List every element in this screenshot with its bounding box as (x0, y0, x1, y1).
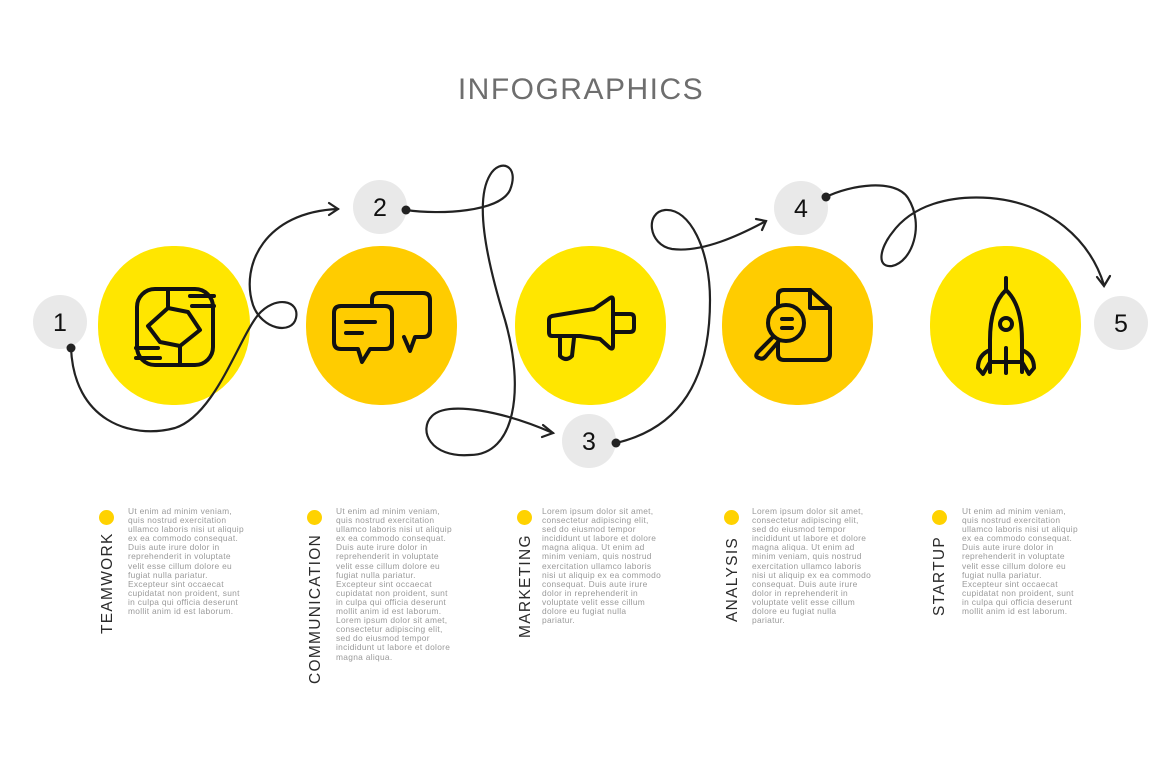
paragraph (336, 506, 452, 662)
paragraph: velit esse cillum dolore eu (962, 561, 1066, 571)
label: COMMUNICATION (307, 534, 324, 684)
paragraph: exercitation ullamco laboris (752, 561, 861, 571)
paragraph: velit esse cillum dolore eu (128, 561, 232, 571)
number circle 4: 4 (794, 195, 808, 223)
paragraph: consectetur adipiscing elit, (542, 515, 649, 525)
paragraph: quis nostrud exercitation (128, 515, 226, 525)
paragraph: incididunt ut labore et dolore (542, 533, 656, 543)
paragraph: Excepteur sint occaecat (336, 579, 432, 589)
paragraph: magna aliqua. Ut enim ad (542, 542, 645, 552)
number circle 5: 5 (1114, 310, 1128, 338)
column 1: teamwork (99, 506, 244, 634)
paragraph: dolore eu fugiat nulla (542, 606, 626, 616)
number circle 2 (353, 180, 407, 234)
paragraph: in culpa qui officia deserunt (128, 597, 238, 607)
paragraph: ullamco laboris nisi ut aliquip (336, 524, 452, 534)
paragraph: minim veniam, quis nostrud (752, 551, 862, 561)
arrow 4 to 5 (822, 185, 1110, 286)
paragraph: incididunt ut labore et dolore (752, 533, 866, 543)
icon: analysis document (756, 290, 830, 360)
paragraph: dolor in reprehenderit in (752, 588, 848, 598)
paragraph: consectetur adipiscing elit, (752, 515, 859, 525)
blob 1 (98, 246, 250, 405)
paragraph: Duis aute irure dolor in (128, 542, 219, 552)
paragraph: incididunt ut labore et dolore (336, 642, 450, 652)
paragraph: Ut enim ad minim veniam, (336, 506, 440, 516)
paragraph: quis nostrud exercitation (336, 515, 434, 525)
paragraph: consequat. Duis aute irure (752, 579, 858, 589)
paragraph: Lorem ipsum dolor sit amet, (752, 506, 863, 516)
number circle 4 (774, 181, 828, 235)
paragraph: Lorem ipsum dolor sit amet, (336, 615, 447, 625)
column 5: startup (931, 506, 1078, 616)
paragraph: dolor in reprehenderit in (542, 588, 638, 598)
label: TEAMWORK (99, 532, 116, 634)
paragraph (542, 506, 661, 625)
number circle 2: 2 (373, 194, 387, 222)
paragraph: ullamco laboris nisi ut aliquip (128, 524, 244, 534)
paragraph: pariatur. (752, 615, 785, 625)
dot (932, 510, 947, 525)
paragraph: cupidatat non proident, sunt (962, 588, 1074, 598)
paragraph: cupidatat non proident, sunt (336, 588, 448, 598)
dot (99, 510, 114, 525)
paragraph: in culpa qui officia deserunt (962, 597, 1072, 607)
paragraph: reprehenderit in voluptate (962, 551, 1065, 561)
dot (724, 510, 739, 525)
paragraph: exercitation ullamco laboris (542, 561, 651, 571)
paragraph: fugiat nulla pariatur. (128, 570, 208, 580)
paragraph: magna aliqua. (336, 652, 393, 662)
icon: teamwork hands (136, 289, 214, 365)
paragraph: mollit anim id est laborum. (962, 606, 1067, 616)
paragraph: pariatur. (542, 615, 575, 625)
paragraph: reprehenderit in voluptate (128, 551, 231, 561)
blob 2 (306, 246, 457, 405)
paragraph: Lorem ipsum dolor sit amet, (542, 506, 653, 516)
paragraph: nisi ut aliquip ex ea commodo (752, 570, 871, 580)
paragraph: nisi ut aliquip ex ea commodo (542, 570, 661, 580)
number circle 1 (33, 295, 87, 349)
title: INFOGRAPHICS (458, 73, 704, 106)
paragraph: mollit anim id est laborum. (128, 606, 233, 616)
paragraph: sed do eiusmod tempor (336, 633, 430, 643)
number circle 5 (1094, 296, 1148, 350)
paragraph (128, 506, 244, 616)
column 2: communication (307, 506, 452, 684)
arrow 2 to 3 (402, 166, 553, 455)
label: ANALYSIS (724, 537, 741, 622)
column 4: analysis (724, 506, 871, 625)
paragraph: dolore eu fugiat nulla (752, 606, 836, 616)
dot (517, 510, 532, 525)
number circle 3: 3 (582, 428, 596, 456)
paragraph: voluptate velit esse cillum (542, 597, 645, 607)
blob 4 (722, 246, 873, 405)
paragraph: magna aliqua. Ut enim ad (752, 542, 855, 552)
paragraph: quis nostrud exercitation (962, 515, 1060, 525)
column 3: marketing (517, 506, 661, 638)
paragraph: fugiat nulla pariatur. (962, 570, 1042, 580)
paragraph: consectetur adipiscing elit, (336, 624, 443, 634)
paragraph: mollit anim id est laborum. (336, 606, 441, 616)
label: MARKETING (517, 534, 534, 638)
paragraph: in culpa qui officia deserunt (336, 597, 446, 607)
icon: chat bubbles (334, 293, 430, 362)
paragraph: Ut enim ad minim veniam, (962, 506, 1066, 516)
icon: rocket (978, 278, 1034, 374)
paragraph: minim veniam, quis nostrud (542, 551, 652, 561)
paragraph: sed do eiusmod tempor (542, 524, 636, 534)
dot (307, 510, 322, 525)
paragraph: cupidatat non proident, sunt (128, 588, 240, 598)
paragraph (962, 506, 1078, 616)
paragraph: Excepteur sint occaecat (128, 579, 224, 589)
number circle 3 (562, 414, 616, 468)
paragraph: Excepteur sint occaecat (962, 579, 1058, 589)
icon: megaphone (549, 297, 634, 359)
paragraph: Duis aute irure dolor in (962, 542, 1053, 552)
paragraph: Ut enim ad minim veniam, (128, 506, 232, 516)
paragraph: ex ea commodo consequat. (336, 533, 446, 543)
paragraph: Duis aute irure dolor in (336, 542, 427, 552)
paragraph (752, 506, 871, 625)
paragraph: fugiat nulla pariatur. (336, 570, 416, 580)
paragraph: ex ea commodo consequat. (962, 533, 1072, 543)
arrow 1 to 2 (66, 203, 338, 431)
paragraph: sed do eiusmod tempor (752, 524, 846, 534)
paragraph: voluptate velit esse cillum (752, 597, 855, 607)
paragraph: ex ea commodo consequat. (128, 533, 238, 543)
number circle 1: 1 (53, 309, 67, 337)
blob 3 (515, 246, 666, 405)
paragraph: consequat. Duis aute irure (542, 579, 648, 589)
blob 5 (930, 246, 1081, 405)
paragraph: reprehenderit in voluptate (336, 551, 439, 561)
label: STARTUP (931, 536, 948, 616)
arrow 3 to 4 (612, 210, 766, 448)
paragraph: ullamco laboris nisi ut aliquip (962, 524, 1078, 534)
paragraph: velit esse cillum dolore eu (336, 561, 440, 571)
